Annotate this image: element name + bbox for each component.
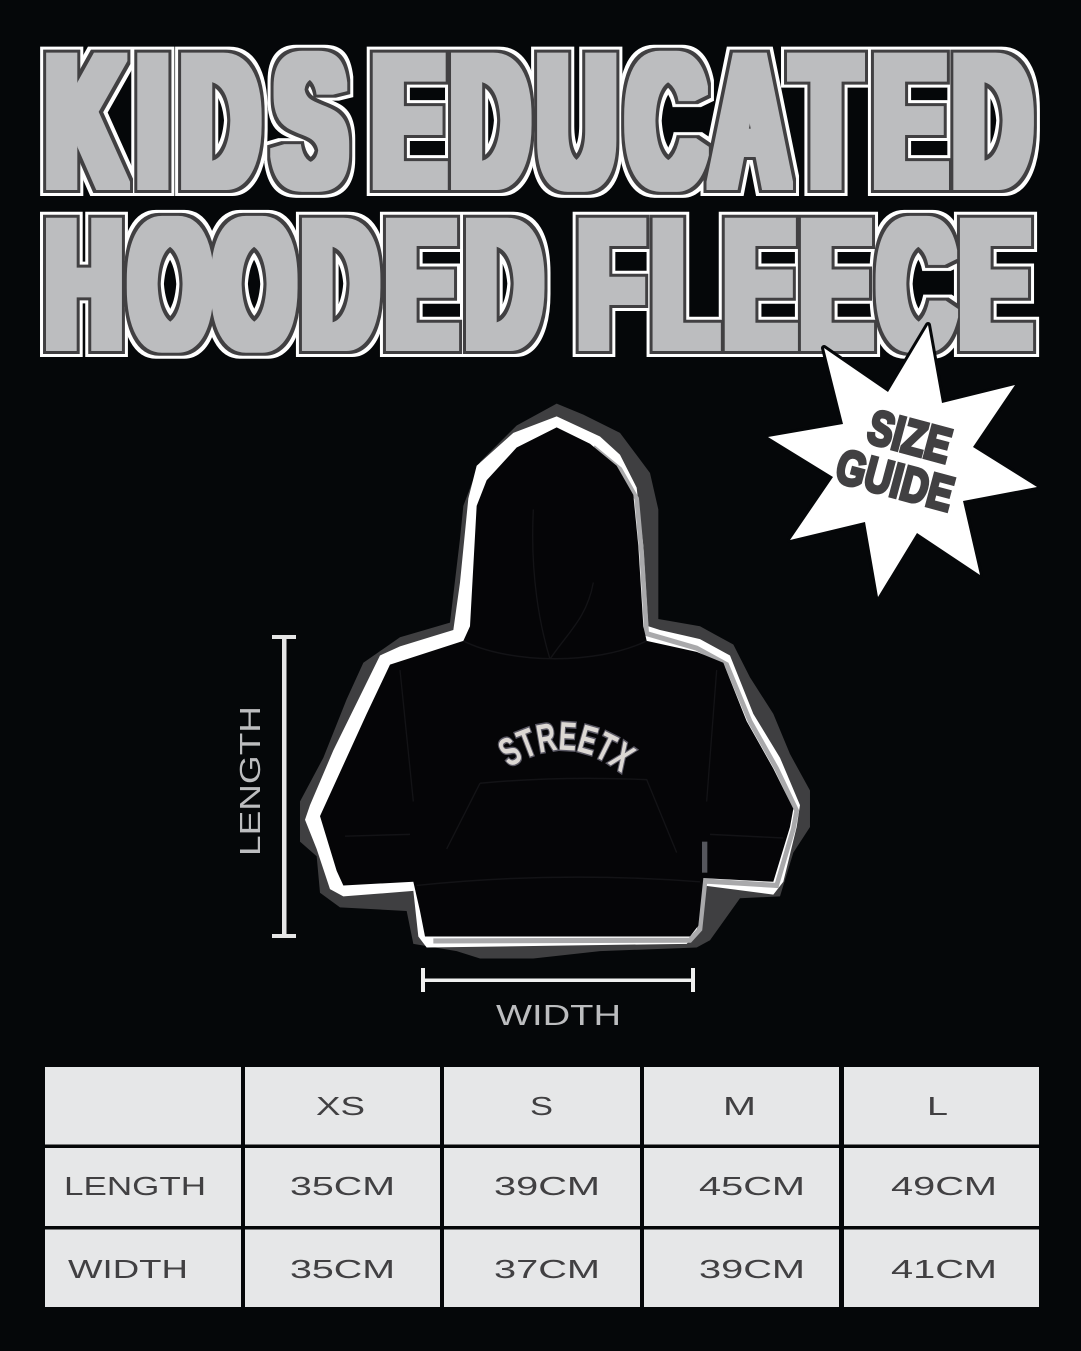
title [47,17,1030,386]
header row: XS [316,1091,365,1121]
width row: WIDTH [68,1254,188,1284]
length row: 49CM [891,1171,997,1201]
table cells [45,1067,1039,1307]
header row: S [530,1091,553,1121]
hoodie seams [345,510,783,885]
size table [45,1067,1039,1307]
streetx chest logo: STREETX [498,720,640,775]
width measure line [421,968,695,992]
length row: LENGTH [64,1171,206,1201]
title line 2: HOODED FLEECE [47,183,1029,386]
width row: 41CM [891,1254,997,1284]
length row [64,1171,997,1201]
length label: LENGTH [235,706,267,856]
side tag [702,842,707,873]
hoodie body [320,427,793,937]
length row: 45CM [699,1171,805,1201]
header row: L [927,1091,948,1121]
width row: 39CM [699,1254,805,1284]
badge text [830,395,971,522]
hoodie grey offset shadow [300,404,810,958]
width row: 35CM [290,1254,395,1284]
hoodie illustration [300,404,810,958]
width label: WIDTH [496,1000,621,1032]
length row: 35CM [290,1171,395,1201]
title line 1: KIDS EDUCATED [47,17,1030,227]
header row [316,1091,948,1121]
badge text: SIZE [862,401,957,474]
width row: 37CM [494,1254,600,1284]
width row [68,1254,997,1284]
length measure line [272,635,296,938]
star shape [768,325,1037,597]
starburst badge: size guide [768,325,1037,597]
length row: 39CM [494,1171,600,1201]
badge text: GUIDE [830,440,959,522]
right side shading [433,447,797,941]
header row: M [723,1091,756,1121]
hoodie white outline [305,416,800,948]
